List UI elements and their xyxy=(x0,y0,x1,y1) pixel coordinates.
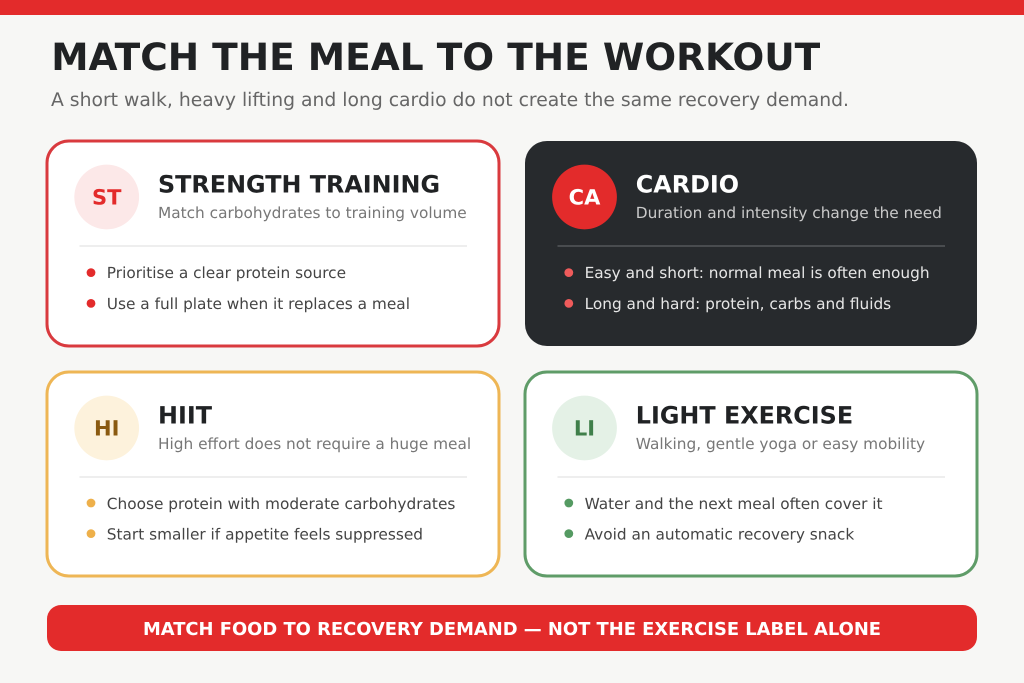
icon: LI badge: LI xyxy=(574,416,595,440)
panel: light exercise xyxy=(525,372,977,576)
heading: HIIT: HIIT xyxy=(158,401,213,429)
bullet: full plate: Use a full plate when it replaces a meal xyxy=(107,295,410,313)
subheading: HIIT: High effort does not require a huge meal xyxy=(158,435,471,453)
callout banner xyxy=(47,605,977,651)
icon: LI badge xyxy=(552,396,617,460)
icon: CA badge xyxy=(552,165,617,229)
bullet: easy and short: Easy and short: normal meal is often enough xyxy=(585,264,930,282)
panel: HIIT xyxy=(47,372,499,576)
heading: cardio: CARDIO xyxy=(636,170,739,198)
bullet: protein source: Prioritise a clear protein source xyxy=(107,264,346,282)
subheading: cardio: Duration and intensity change the need xyxy=(636,204,942,222)
heading: light exercise: LIGHT EXERCISE xyxy=(636,401,853,429)
bullet: water and next meal: Water and the next meal often cover it xyxy=(585,495,883,513)
icon: CA badge: CA xyxy=(569,186,601,210)
callout banner: MATCH FOOD TO RECOVERY DEMAND — NOT THE EXERCISE LABEL ALONE xyxy=(143,619,881,640)
subtitle: A short walk, heavy lifting and long cardio do not create the same recovery demand. xyxy=(51,90,849,111)
top accent bar xyxy=(0,0,1024,15)
icon: ST badge xyxy=(74,165,139,229)
bullet: recovery snack: Avoid an automatic recovery snack xyxy=(585,526,854,544)
bullet: start smaller: Start smaller if appetite feels suppressed xyxy=(107,526,423,544)
title: MATCH THE MEAL TO THE WORKOUT xyxy=(51,35,821,79)
subheading: strength training: Match carbohydrates to training volume xyxy=(158,204,467,222)
panel: cardio xyxy=(525,141,977,346)
icon: HI badge: HI xyxy=(94,416,119,440)
icon: ST badge: ST xyxy=(92,186,122,210)
icon: HI badge xyxy=(74,396,139,460)
bullet: moderate carbohydrates: Choose protein with moderate carbohydrates xyxy=(107,495,455,513)
subheading: light exercise: Walking, gentle yoga or easy mobility xyxy=(636,435,925,453)
heading: strength training: STRENGTH TRAINING xyxy=(158,170,440,198)
bullet: long and hard: Long and hard: protein, carbs and fluids xyxy=(585,295,891,313)
panel: strength training xyxy=(47,141,499,346)
